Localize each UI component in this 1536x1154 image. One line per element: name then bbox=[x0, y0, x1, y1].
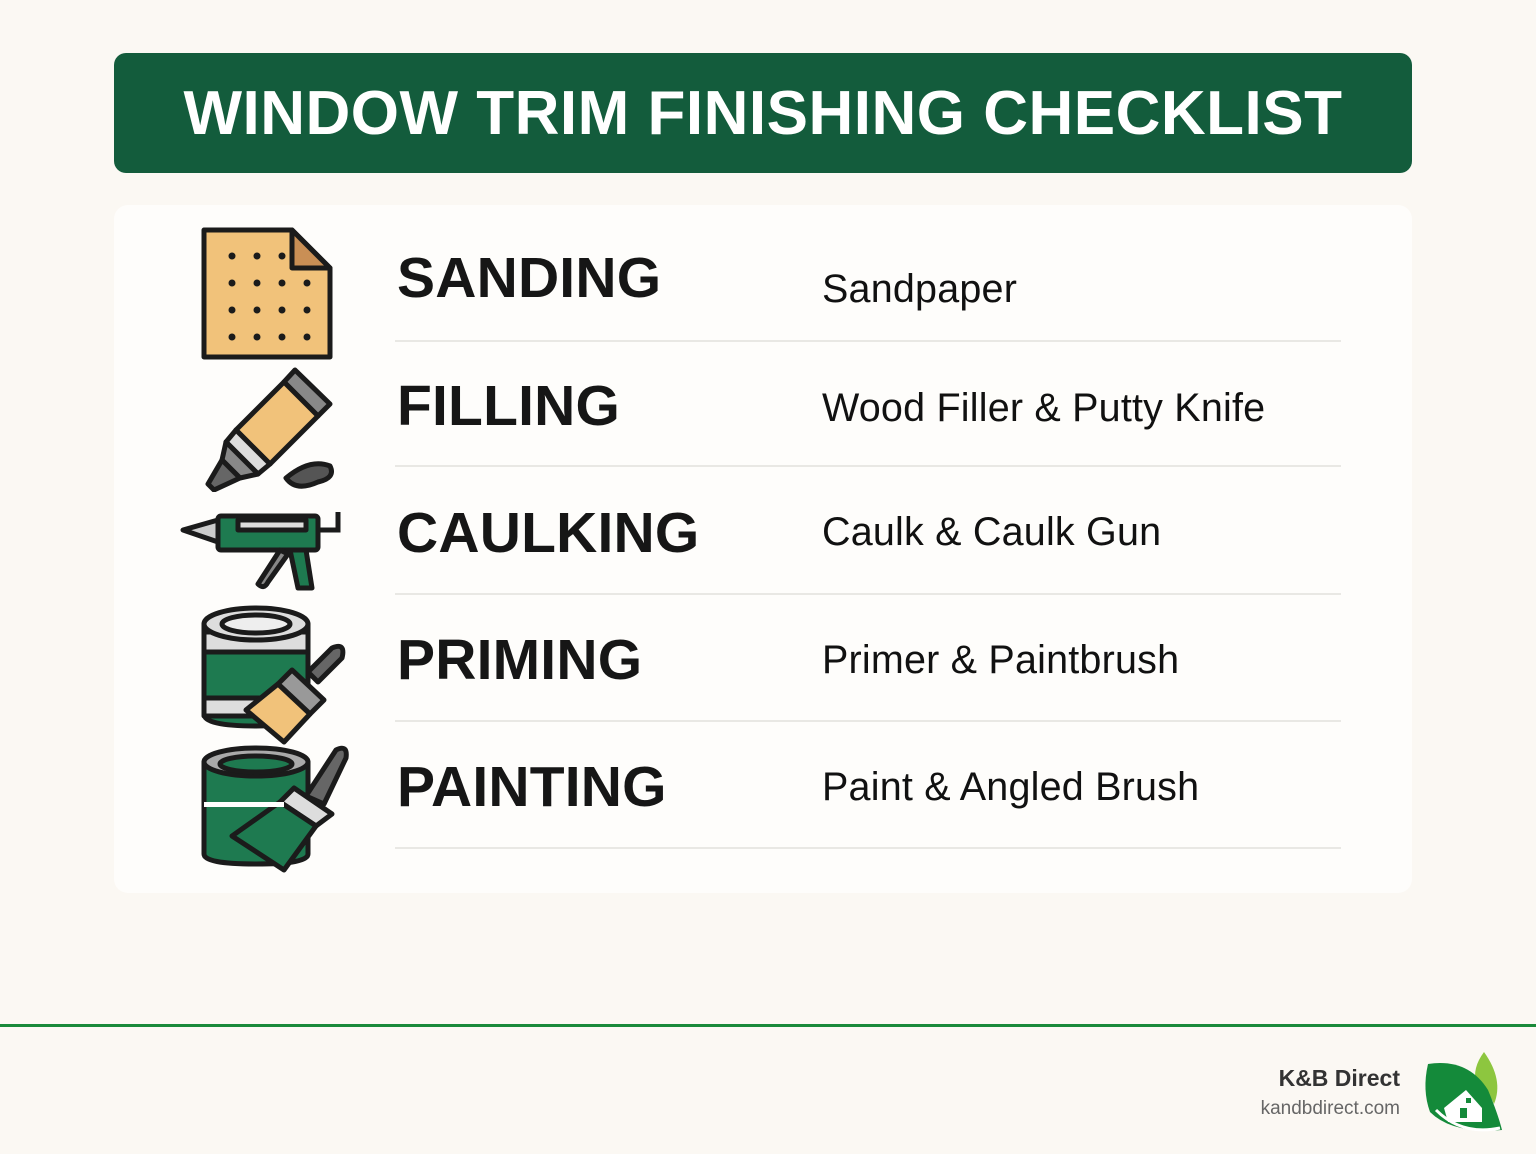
panel: checklist bbox=[114, 205, 1412, 893]
text: sandpaper: Sandpaper bbox=[822, 267, 1017, 311]
heading: caulking: CAULKING bbox=[397, 501, 699, 565]
icon: primer can bbox=[202, 606, 346, 744]
footer brand text bbox=[1261, 1065, 1400, 1119]
icon: caulk gun bbox=[180, 512, 340, 590]
title banner bbox=[114, 53, 1412, 173]
text: primer: Primer & Paintbrush bbox=[822, 638, 1179, 682]
icon: filler tube bbox=[205, 368, 334, 492]
icon: sandpaper bbox=[202, 228, 332, 360]
title banner: WINDOW TRIM FINISHING CHECKLIST bbox=[184, 79, 1342, 148]
heading: sanding: SANDING bbox=[397, 246, 661, 310]
text: caulk: Caulk & Caulk Gun bbox=[822, 510, 1161, 554]
heading: filling: FILLING bbox=[397, 374, 620, 438]
heading: painting: PAINTING bbox=[397, 755, 667, 819]
icon: logo bbox=[1425, 1052, 1502, 1132]
text: paint: Paint & Angled Brush bbox=[822, 765, 1199, 809]
footer brand text: K&B Direct bbox=[1279, 1065, 1400, 1091]
footer line bbox=[0, 1024, 1536, 1027]
heading: priming: PRIMING bbox=[397, 628, 642, 692]
icon: paint can bbox=[202, 746, 349, 872]
text: filler: Wood Filler & Putty Knife bbox=[822, 386, 1265, 430]
footer brand text: kandbdirect.com bbox=[1261, 1098, 1400, 1119]
